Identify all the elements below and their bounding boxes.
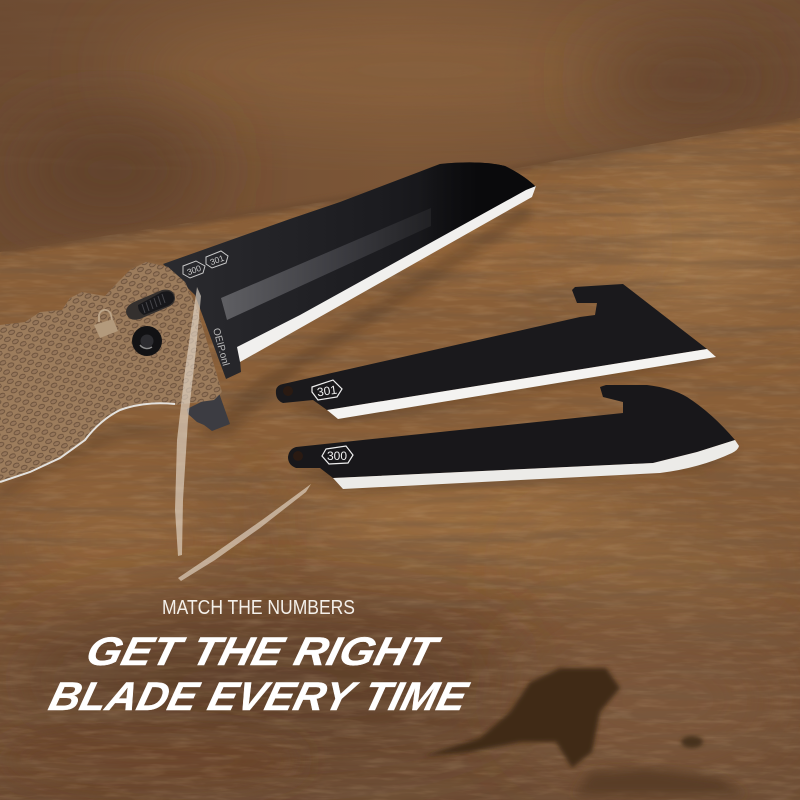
blade edge <box>237 186 536 362</box>
headline line 2: BLADE EVERY TIME <box>45 674 474 719</box>
replacement blade 300 <box>288 385 739 489</box>
mounting hole <box>283 386 293 396</box>
icon: lock <box>94 310 118 338</box>
pivot screw <box>132 326 162 356</box>
slider recess and thumb switch <box>126 290 175 320</box>
badge 300: 300 <box>327 449 347 463</box>
subtitle: MATCH THE NUMBERS <box>162 597 355 619</box>
blade shadows <box>285 330 738 492</box>
main knife <box>0 162 536 482</box>
annotation brush stroke to blade <box>178 484 311 581</box>
etched badge 301: 301 <box>209 253 226 267</box>
handle <box>0 262 222 482</box>
badge 301 <box>312 380 342 400</box>
dark knot stains <box>424 668 620 768</box>
headline <box>45 629 474 719</box>
etched badge 300: 300 <box>186 263 203 277</box>
etched badge 300 <box>183 261 205 278</box>
badge 301: 301 <box>316 383 338 399</box>
blade fuller <box>221 208 431 320</box>
headline line 1: GET THE RIGHT <box>82 629 445 674</box>
replacement blade 301 <box>276 284 716 419</box>
main blade <box>163 162 536 379</box>
etched brand mark: OEIP.onl <box>210 327 231 367</box>
blade dark tip <box>400 162 536 254</box>
etched badge 301 <box>206 251 228 268</box>
mounting hole <box>293 451 303 461</box>
knife shadow <box>0 200 530 497</box>
hook tab <box>187 393 230 431</box>
annotation brush stroke to knife <box>175 287 201 556</box>
handle liner edge <box>0 403 175 482</box>
badge 300 <box>322 446 353 464</box>
